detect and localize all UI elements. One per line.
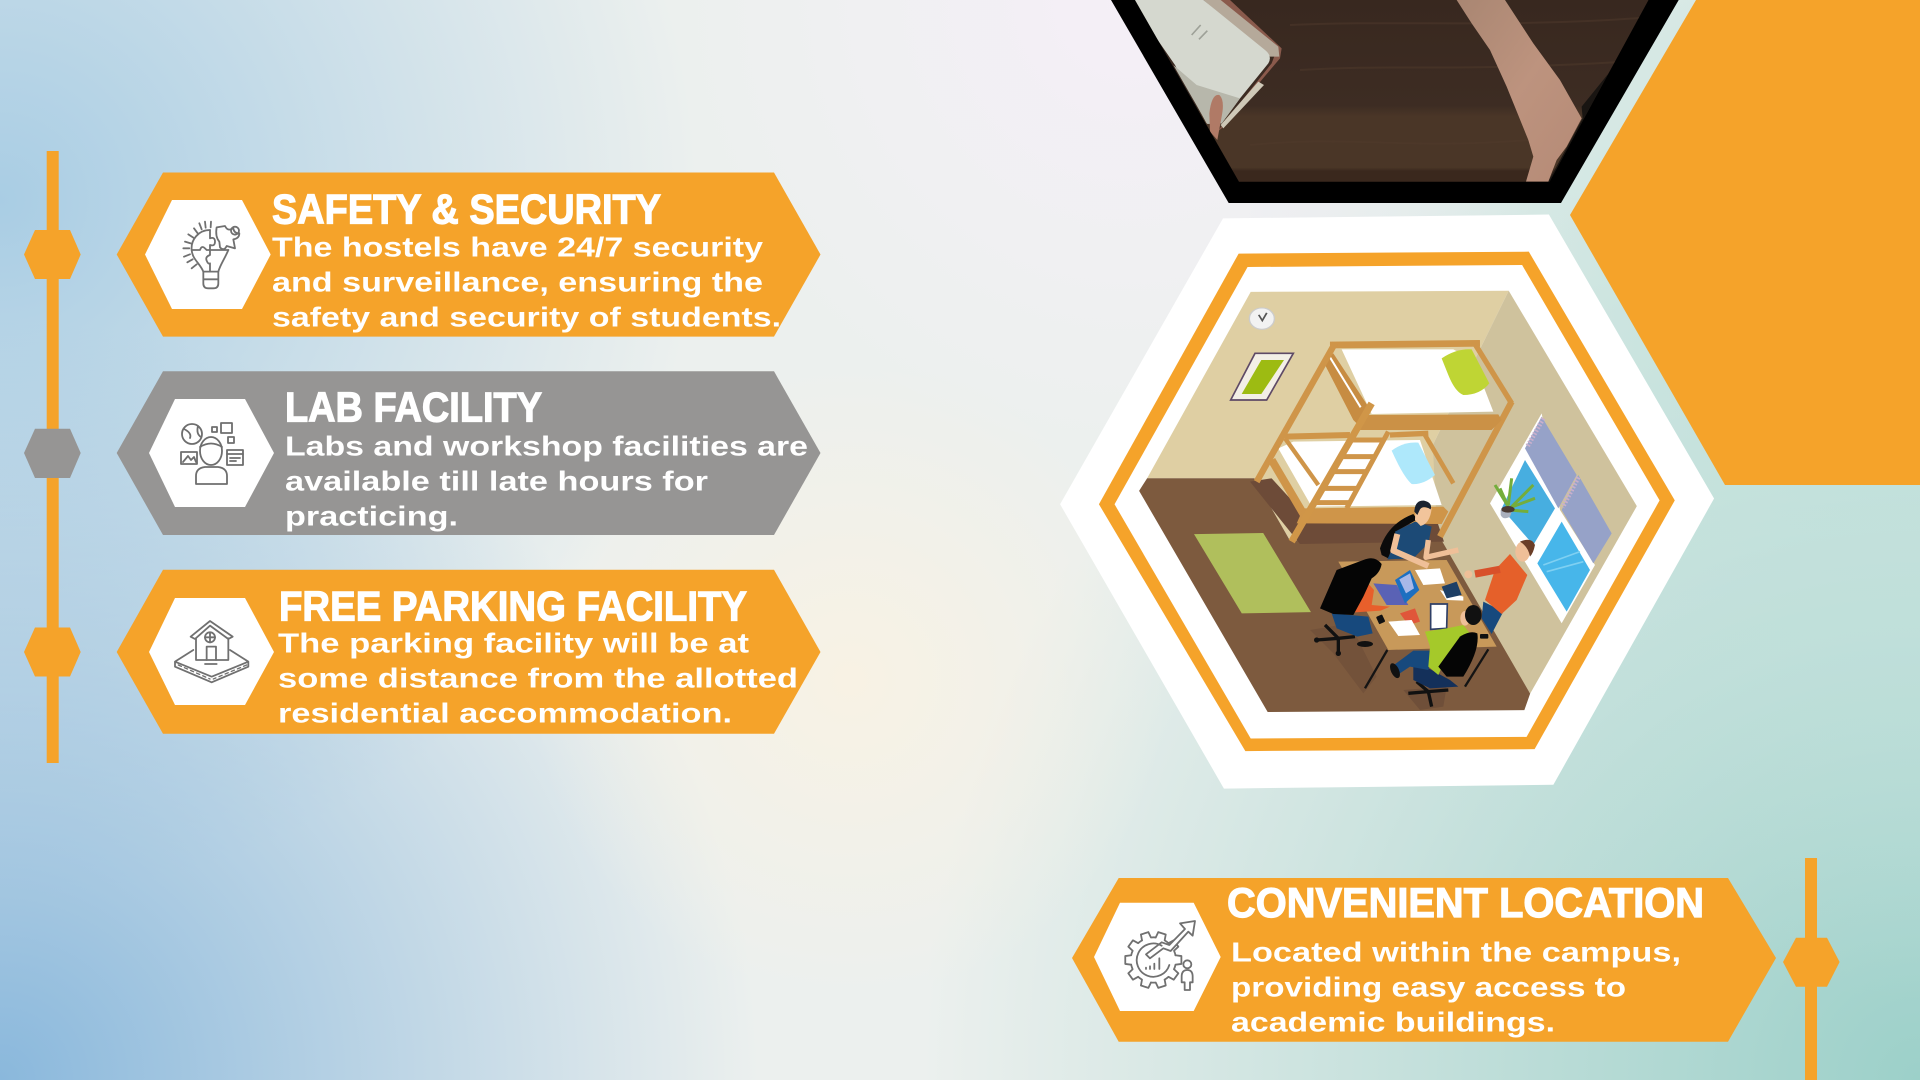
panel: convenient location <box>1072 878 1776 1042</box>
timeline node 3 <box>24 628 81 676</box>
person: orange shirt <box>1464 540 1535 634</box>
heading: CONVENIENT LOCATION <box>1227 879 1704 926</box>
inner white hexagon <box>1115 265 1660 738</box>
left timeline <box>24 151 81 763</box>
body text: practicing. <box>285 500 458 532</box>
timeline node 2 <box>24 429 81 478</box>
body text: Located within the campus, <box>1231 936 1681 968</box>
white hexagon frame <box>1060 215 1714 789</box>
timeline node 1 <box>24 230 81 279</box>
body text <box>1231 936 1681 1038</box>
panel: free parking facility <box>117 570 820 734</box>
person: green hoodie <box>1388 605 1482 707</box>
body text: residential accommodation. <box>278 698 732 728</box>
person: black hoodie <box>1314 558 1390 656</box>
icon hexagon: house on plot <box>149 598 274 705</box>
heading: SAFETY & SECURITY <box>272 186 661 232</box>
notebook <box>1130 0 1282 140</box>
body text: The parking facility will be at <box>278 628 749 658</box>
person: blue shirt <box>1380 501 1458 566</box>
icon hexagon: person with screens <box>149 399 274 507</box>
desk <box>1338 560 1497 688</box>
body text <box>285 430 808 532</box>
icon hexagon: lightbulb puzzle <box>145 200 271 309</box>
body text: available till late hours for <box>285 466 708 496</box>
window with curtains and plant <box>1490 413 1612 623</box>
bunk bed and wall picture <box>1231 343 1512 544</box>
right timeline <box>1783 858 1840 1080</box>
body text: The hostels have 24/7 security <box>272 232 764 263</box>
body text <box>278 628 798 728</box>
room walls and floor <box>1139 291 1637 712</box>
body text: some distance from the allotted <box>278 662 798 694</box>
body text: Labs and workshop facilities are <box>285 430 808 462</box>
heading: FREE PARKING FACILITY <box>279 582 747 630</box>
icon hexagon: gear with rising arrow <box>1094 903 1221 1011</box>
body text: providing easy access to <box>1231 972 1626 1002</box>
photo hexagon: hands and notebook on wooden table <box>1111 0 1679 203</box>
arm <box>1456 0 1608 182</box>
body text: and surveillance, ensuring the <box>272 267 763 298</box>
orange hexagon ring <box>1099 252 1675 751</box>
timeline node <box>1783 938 1840 987</box>
orange corner hexagon <box>1570 0 1920 485</box>
panel: safety and security <box>117 172 820 337</box>
panel: lab facility <box>117 371 820 535</box>
timeline bar <box>1805 858 1817 1080</box>
body text <box>272 232 781 333</box>
hexagon room illustration <box>1060 215 1714 789</box>
body text: academic buildings. <box>1231 1006 1555 1038</box>
body text: safety and security of students. <box>272 302 781 333</box>
students around a table <box>1310 501 1535 710</box>
timeline bar <box>47 151 59 763</box>
heading: LAB FACILITY <box>285 384 542 430</box>
